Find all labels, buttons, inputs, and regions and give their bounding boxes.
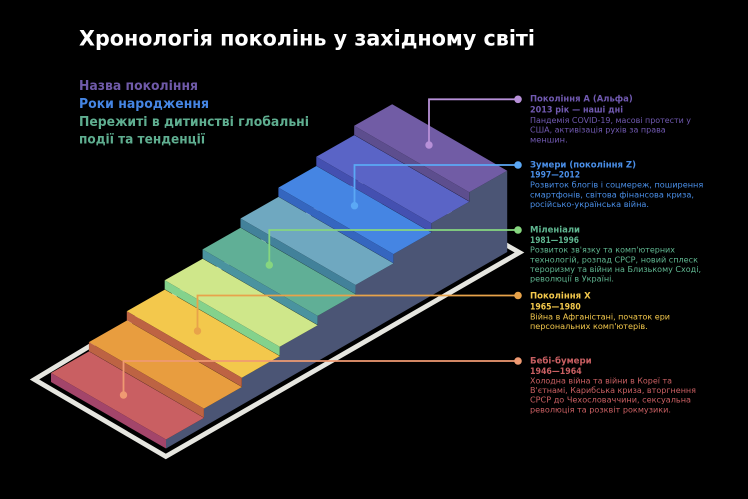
text block: alpha: меншин. — [530, 134, 568, 144]
text block: generation X: Покоління Х — [530, 291, 591, 302]
text block: zoomers: російсько-українська війна. — [530, 199, 649, 209]
text block: millennials — [530, 224, 701, 284]
text block: alpha: Покоління А (Альфа) — [530, 94, 633, 105]
legend: Назва покоління — [79, 79, 198, 94]
text block: alpha — [530, 94, 691, 144]
text block: generation X — [530, 291, 670, 331]
text block: millennials: 1981—1996 — [530, 235, 579, 246]
text block: zoomers: Розвиток блогів і соцмереж, поширення — [530, 180, 703, 190]
text block: millennials: тероризму та війни на Близькому Сході, — [530, 264, 701, 274]
text block: boomers: СРСР до Чехословаччини, сексуальна — [530, 395, 691, 405]
step: grey blue — [240, 197, 394, 294]
connector: alpha — [425, 96, 522, 149]
text block: alpha: США, активізація рухів за права — [530, 125, 666, 135]
text block: boomers: 1946—1964 — [530, 366, 582, 377]
legend: Пережиті в дитинстві глобальні — [79, 115, 309, 130]
legend — [79, 79, 309, 148]
text block: boomers: В'єтнамі, Карибська криза, вторгнення — [530, 385, 696, 395]
text block: generation X: персональних комп'ютерів. — [530, 321, 648, 331]
step: light green — [165, 259, 318, 356]
text block: zoomers — [530, 159, 703, 209]
text block: millennials: Міленіали — [530, 224, 580, 236]
staircase side wall — [166, 171, 507, 448]
text block: boomers: революція та розквіт рокмузики. — [530, 404, 671, 414]
step: red — [51, 351, 204, 448]
step: teal — [203, 228, 356, 325]
staircase — [51, 104, 507, 448]
text block: millennials: технологій, розпад СРСР, новий сплеск — [530, 254, 698, 264]
step: blue — [278, 166, 431, 263]
text block: generation X: 1965—1980 — [530, 301, 581, 312]
text block: alpha: Пандемія COVID-19, масові протести у — [530, 115, 691, 125]
text block: generation X: Війна в Афганістані, початок ери — [530, 311, 670, 321]
step: purple — [354, 104, 507, 201]
text block: millennials: революції в Україні. — [530, 274, 614, 284]
legend: Роки народження — [79, 97, 209, 112]
text block: boomers — [530, 355, 696, 414]
step: orange — [89, 320, 242, 418]
connector: zoomers — [351, 161, 522, 209]
connector: boomers — [120, 357, 522, 399]
text block: alpha: 2013 рік — наші дні — [530, 104, 623, 115]
text block: boomers: Бебі-бумери — [530, 355, 592, 366]
text block: zoomers: 1997—2012 — [530, 170, 580, 181]
text block: millennials: Розвиток зв'язку та комп'ютерних — [530, 245, 675, 255]
connector: millennials — [266, 226, 522, 269]
text block: zoomers: Зумери (покоління Z) — [530, 159, 636, 170]
text block: zoomers: смартфонів, світова фінансова криза, — [530, 189, 694, 199]
step: yellow — [127, 290, 280, 387]
step: indigo — [316, 135, 469, 232]
text block: boomers: Холодна війна та війни в Кореї та — [530, 376, 672, 386]
base frame — [34, 172, 520, 456]
title: Хронологія поколінь у західному світі — [79, 26, 535, 50]
legend: події та тенденції — [79, 132, 205, 148]
connector: generation X — [194, 292, 522, 335]
